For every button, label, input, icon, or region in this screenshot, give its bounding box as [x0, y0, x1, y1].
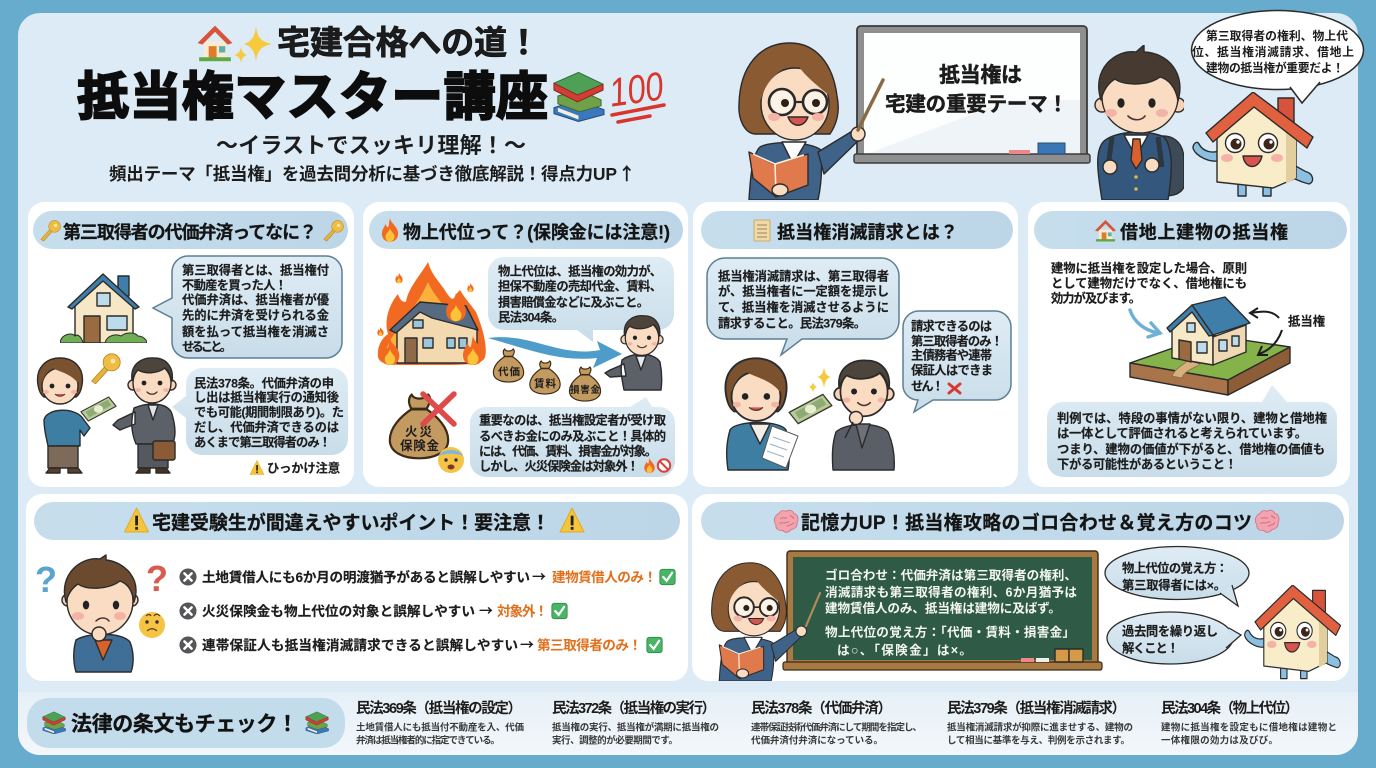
money bag: price — [493, 349, 524, 382]
speech bubble: memorize: 第三取得者には×。 — [1122, 578, 1226, 592]
bubble: important note: るべきお金にのみ及ぶこと！具体的 — [479, 428, 666, 444]
bubble: case law — [1047, 385, 1337, 477]
footer heading pill — [27, 698, 345, 748]
article 378: 代価弁済付弁済になっている。 — [751, 734, 883, 746]
heading pill — [34, 502, 680, 540]
blackboard: 消滅請求も第三取得者の権利、6か月猶予は — [825, 584, 1077, 600]
speech bubble: repeat past exams: 解くこと！ — [1122, 640, 1179, 656]
document — [762, 426, 798, 468]
arrow: to building — [1130, 310, 1160, 337]
footer: legal articles — [18, 692, 1358, 755]
teacher figure — [712, 563, 807, 681]
speech bubble: memorize: 物上代位の覚え方： — [1122, 560, 1228, 576]
hero illustration: teacher and whiteboard — [739, 26, 1090, 200]
icon: money — [81, 397, 116, 421]
bubble: important note: 重要なのは、抵当権設定者が受け取 — [479, 412, 667, 428]
mistake 1: 建物賃借人のみ！ — [552, 569, 657, 585]
heading pill: 物上代位って？(保険金には注意!) — [403, 222, 670, 242]
whiteboard text: 抵当権は — [939, 64, 1022, 87]
speech bubble: house mascot: 建物の抵当権が重要だよ！ — [1206, 61, 1344, 75]
icon: 100 points: 100 — [607, 65, 666, 116]
money bag: rent — [530, 361, 560, 394]
heading pill: 第三取得者の代価弁済ってなに？ — [63, 222, 317, 242]
article 369: 弁済は抵当権者的に指定できている。 — [356, 734, 500, 746]
bubble: who can demand: 第三取得者のみ！ — [911, 334, 1003, 348]
speech bubble: repeat past exams: 過去問を繰り返し — [1122, 624, 1218, 638]
speech bubble: house mascot — [1192, 10, 1364, 103]
bubble: article 378: 民法378条。代価弁済の申 — [194, 376, 334, 390]
bubble: definition: が、抵当権者に一定額を提示し — [718, 284, 889, 298]
blackboard — [783, 551, 1102, 670]
figure: man — [605, 316, 663, 390]
money bag: damages — [569, 367, 601, 401]
panel: common mistakes — [26, 494, 688, 681]
article 304: 一体権限の効力は及びび。 — [1161, 734, 1278, 746]
article 304: 民法304条（物上代位） — [1161, 699, 1299, 717]
bubble: definition: て、抵当権を消滅させるように — [718, 300, 889, 314]
mistake 1 — [179, 567, 675, 587]
icon: prohibited — [658, 459, 670, 472]
icon: books — [554, 72, 604, 122]
money bag: damages: 損害金 — [570, 384, 600, 396]
explanation text — [1051, 260, 1247, 306]
title block — [77, 24, 666, 186]
icon: scroll — [754, 220, 770, 241]
money bag: price: 代価 — [498, 365, 520, 378]
icon: red question mark: ? — [146, 558, 168, 599]
mistake 3: 第三取得者のみ！ — [537, 637, 642, 653]
heading pill — [33, 211, 348, 249]
icon: scared face — [438, 447, 464, 473]
house mascot — [1245, 585, 1341, 679]
article 379: して相当に基準を与え、判例を示されます。 — [947, 734, 1130, 746]
bubble: definition: 抵当権消滅請求は、第三取得者 — [718, 268, 889, 284]
icon: sparkles — [809, 367, 831, 393]
arrow: to mortgagee — [488, 337, 622, 368]
heading pill — [701, 211, 1013, 249]
bubble: who can demand: 請求できるのは — [911, 318, 992, 334]
figure: buyer with money — [38, 358, 90, 473]
student figure — [1095, 45, 1185, 200]
article 378 — [751, 699, 922, 746]
bubble: subrogation definition: 損害賠償金などに及ぶこと。 — [498, 294, 649, 310]
teacher figure — [739, 43, 865, 200]
heading pill — [369, 211, 683, 249]
mistake 2: 火災保険金も物上代位の対象と誤解しやすい — [202, 603, 475, 619]
bubble: definition — [707, 258, 899, 355]
article 304 — [1161, 699, 1337, 746]
tagline: 頻出テーマ「抵当権」を過去問分析に基づき徹底解説！得点力UP — [109, 164, 617, 184]
bubble: definition — [153, 256, 342, 358]
heading pill: 抵当権消滅請求とは？ — [777, 222, 958, 242]
footer heading pill: 法律の条文もチェック！ — [71, 713, 298, 736]
figure: buyer with document — [725, 358, 798, 470]
mistake 2: 対象外！ — [497, 603, 548, 619]
main title: 抵当権マスター講座 — [77, 69, 548, 127]
bubble: definition: 額を払って抵当権を消滅さ — [182, 324, 329, 339]
panel: extinguishment demand — [693, 202, 1018, 487]
icon: puzzled face — [139, 612, 165, 638]
bubble: definition: 第三取得者とは、抵当権付 — [182, 262, 329, 278]
money bag: fire insurance: 火災 — [405, 425, 432, 439]
bubble: case law: 下がる可能性があるということ！ — [1057, 456, 1237, 472]
blackboard: 建物賃借人のみ、抵当権は建物に及ばず。 — [825, 600, 1061, 616]
money bag: fire insurance — [390, 394, 464, 473]
whiteboard: 宅建の重要テーマ！ — [885, 93, 1068, 116]
bubble: who can demand: せん！ — [911, 380, 944, 394]
money bag: fire insurance: 保険金 — [400, 438, 439, 453]
bubble: article 378: あくまで第三取得者のみ！ — [194, 434, 331, 450]
mistake 2 — [179, 601, 567, 621]
icon: money — [789, 394, 832, 424]
bubble: case law: 判例では、特段の事情がない限り、建物と借地権 — [1057, 410, 1327, 426]
icon: fire — [644, 458, 655, 473]
tagline: ↑ — [618, 161, 636, 186]
subtitle: 〜イラストでスッキリ理解！〜 — [216, 133, 526, 158]
article 369 — [356, 699, 524, 746]
heading pill: 借地上建物の抵当権 — [1120, 222, 1288, 242]
icon: house — [60, 274, 147, 343]
article 378: 民法378条（代価弁済） — [751, 699, 892, 717]
burning house — [377, 262, 486, 365]
bubble: important note: しかし、火災保険金は対象外！ — [479, 458, 639, 474]
mistake 3: → — [520, 635, 534, 655]
explanation text: 効力が及びます。 — [1051, 290, 1141, 306]
bubble: subrogation definition: 民法304条。 — [498, 310, 564, 324]
pointer — [858, 80, 883, 130]
whiteboard — [854, 26, 1090, 163]
explanation text: として建物だけでなく、借地権にも — [1051, 276, 1247, 290]
bubble: definition: 代価弁済は、抵当権者が優 — [182, 292, 330, 307]
money bag: rent: 賃料 — [534, 377, 556, 390]
article 372: 抵当権の実行、抵当権が満期に抵当権の — [552, 722, 719, 734]
title line 1: 宅建合格への道！ — [277, 24, 540, 61]
bubble: case law: つまり、建物の価値が下がると、借地権の価値も — [1057, 442, 1325, 456]
heading pill — [701, 502, 1344, 540]
heading pill: 宅建受験生が間違えやすいポイント！要注意！ — [152, 511, 550, 534]
mistake 2: → — [479, 601, 493, 621]
bubble: article 378: し出は抵当権実行の通知後 — [194, 390, 340, 404]
speech bubble: house mascot: 位、抵当権消滅請求、借地上 — [1192, 45, 1354, 59]
icon: red cross — [949, 384, 960, 393]
bubble: subrogation definition: 担保不動産の売却代金、賃料、 — [498, 278, 662, 294]
icon: house emoji — [198, 26, 232, 61]
bubble: definition: せること。 — [182, 340, 232, 354]
article 369: 土地賃借人にも抵当付不動産を入、代価 — [356, 722, 524, 734]
bubble: subrogation definition: 物上代位は、抵当権の効力が、 — [498, 264, 662, 278]
icon: key — [92, 354, 120, 384]
heading pill: 記憶力UP！抵当権攻略のゴロ合わせ＆覚え方のコツ — [801, 511, 1252, 534]
house mascot — [1193, 92, 1313, 196]
callout: trap warning: ひっかけ注意 — [267, 460, 340, 476]
icon: red cross — [423, 394, 454, 424]
panel: subrogation — [363, 202, 688, 487]
figure: confused student — [62, 555, 138, 672]
blackboard: 物上代位の覚え方：「代価・賃料・損害金」 — [825, 624, 1075, 640]
panel: third party payment — [28, 202, 354, 487]
article 372 — [552, 699, 719, 746]
mistake 3 — [179, 635, 662, 655]
bubble: who can demand — [903, 311, 1011, 412]
speech bubble: house mascot: 第三取得者の権利、物上代 — [1206, 29, 1348, 43]
article 379: 抵当権消滅請求が抑際に進ませする、建物の — [947, 722, 1133, 734]
arrows: mortgage scope — [1250, 308, 1282, 355]
article 379: 民法379条（抵当権消滅請求） — [947, 699, 1126, 717]
bubble: article 378: でも可能(期間制限あり)。た — [194, 404, 344, 420]
figure: man with briefcase — [113, 358, 176, 473]
label: mortgage: 抵当権 — [1288, 314, 1325, 328]
bubble: important note: には、代価、賃料、損害金が対象。 — [479, 444, 657, 458]
icon: blue question mark: ? — [35, 559, 57, 600]
bubble: definition: 先的に弁済を受けられる金 — [182, 308, 330, 322]
article 372: 民法372条（抵当権の実行） — [552, 699, 716, 717]
bubble: who can demand: 主債務者や連帯 — [911, 348, 992, 362]
article 369: 民法369条（抵当権の設定） — [356, 699, 522, 717]
blackboard: は○、「保険金」は×。 — [837, 642, 972, 658]
bubble: article 378: だし、代価弁済できるのは — [194, 420, 339, 434]
bubble: definition: 請求すること。民法379条。 — [718, 316, 866, 330]
speech bubble: repeat past exams — [1107, 612, 1241, 664]
article 378: 連帯保証技術代価弁済にして期間を指定し、 — [751, 722, 922, 734]
blackboard: ゴロ合わせ：代価弁済は第三取得者の権利、 — [825, 568, 1077, 582]
bubble: who can demand: 保証人はできま — [911, 364, 993, 378]
bubble: case law: は一体として評価されると考えられています。 — [1057, 426, 1307, 440]
icon: sparkles — [234, 26, 272, 63]
mistake 1: 土地賃借人にも6か月の明渡猶予があると誤解しやすい — [202, 569, 530, 585]
figure: thinking man — [832, 360, 894, 470]
bubble: article 378 — [172, 368, 348, 455]
bubble: important note — [470, 397, 675, 477]
land and building — [1130, 297, 1290, 395]
bubble: definition: 不動産を買った人！ — [182, 278, 287, 292]
article 379 — [947, 699, 1133, 746]
article 372: 実行、調整的が必要期間です。 — [552, 734, 678, 746]
speech bubble: memorize — [1105, 546, 1249, 606]
mistake 1: → — [532, 567, 546, 587]
pointer — [806, 593, 820, 626]
mistake 3: 連帯保証人も抵当権消滅請求できると誤解しやすい — [202, 637, 518, 653]
heading pill — [1034, 211, 1347, 249]
panel: memory tips — [692, 494, 1349, 681]
bubble: subrogation definition — [488, 257, 674, 342]
panel: building on leased land — [1028, 202, 1350, 487]
explanation text: 建物に抵当権を設定した場合、原則 — [1051, 260, 1247, 276]
article 304: 建物に抵当権を設定もに借地権は建物と — [1161, 722, 1337, 734]
